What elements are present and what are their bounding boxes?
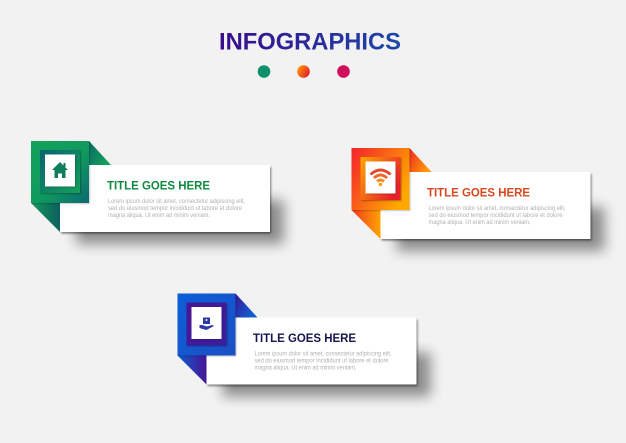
- body text: [428, 205, 566, 226]
- panel: orange card: [352, 148, 604, 251]
- body text: magna aliqua. Ut enim ad minim veniam,: [254, 364, 357, 372]
- icon: wifi: [370, 170, 390, 186]
- body text: magna aliqua. Ut enim ad minim veniam,: [428, 219, 531, 226]
- heading: TITLE GOES HERE: [253, 333, 356, 345]
- inner square: [40, 150, 80, 193]
- heading: TITLE GOES HERE: [427, 188, 530, 200]
- top fold triangle: [410, 148, 432, 172]
- outer square: [31, 141, 89, 203]
- body text: magna aliqua. Ut enim ad minim veniam,: [108, 212, 210, 219]
- icon: house: [52, 162, 68, 178]
- body text: sed do eiusmod tempor incididunt ut labore et dolore: [254, 358, 389, 364]
- body text: [108, 198, 245, 219]
- inner square: [186, 302, 226, 346]
- white card: [380, 172, 590, 239]
- bottom fold triangle: [31, 203, 60, 232]
- icon tile: [192, 307, 222, 339]
- icon tile: [45, 154, 75, 186]
- body text: [254, 350, 392, 372]
- icon: hand with box: [200, 318, 214, 330]
- body text: Lorem ipsum dolor sit amet, consectetur adipiscing elit,: [108, 198, 245, 205]
- white card: [60, 165, 270, 232]
- heading: TITLE GOES HERE: [107, 180, 210, 192]
- bottom fold triangle: [178, 356, 206, 384]
- outer square: [352, 148, 410, 210]
- title: INFOGRAPHICS: [219, 28, 401, 56]
- body text: Lorem ipsum dolor sit amet, consectetur adipiscing elit,: [428, 205, 566, 212]
- panel: blue card: [178, 294, 430, 396]
- inner square: [360, 157, 400, 200]
- top fold triangle: [236, 294, 258, 318]
- white card: [206, 318, 416, 384]
- outer square: [178, 294, 236, 356]
- top fold triangle: [89, 141, 111, 165]
- body text: sed do eiusmod tempor incididunt ut labore et dolore: [108, 205, 242, 212]
- bottom fold triangle: [352, 210, 380, 239]
- body text: Lorem ipsum dolor sit amet, consectetur adipiscing elit,: [254, 350, 392, 358]
- body text: sed do eiusmod tempor incididunt ut labore et dolore: [428, 212, 563, 219]
- colored dots: [258, 65, 350, 78]
- icon tile: [366, 162, 396, 194]
- panel: green card: [31, 141, 284, 244]
